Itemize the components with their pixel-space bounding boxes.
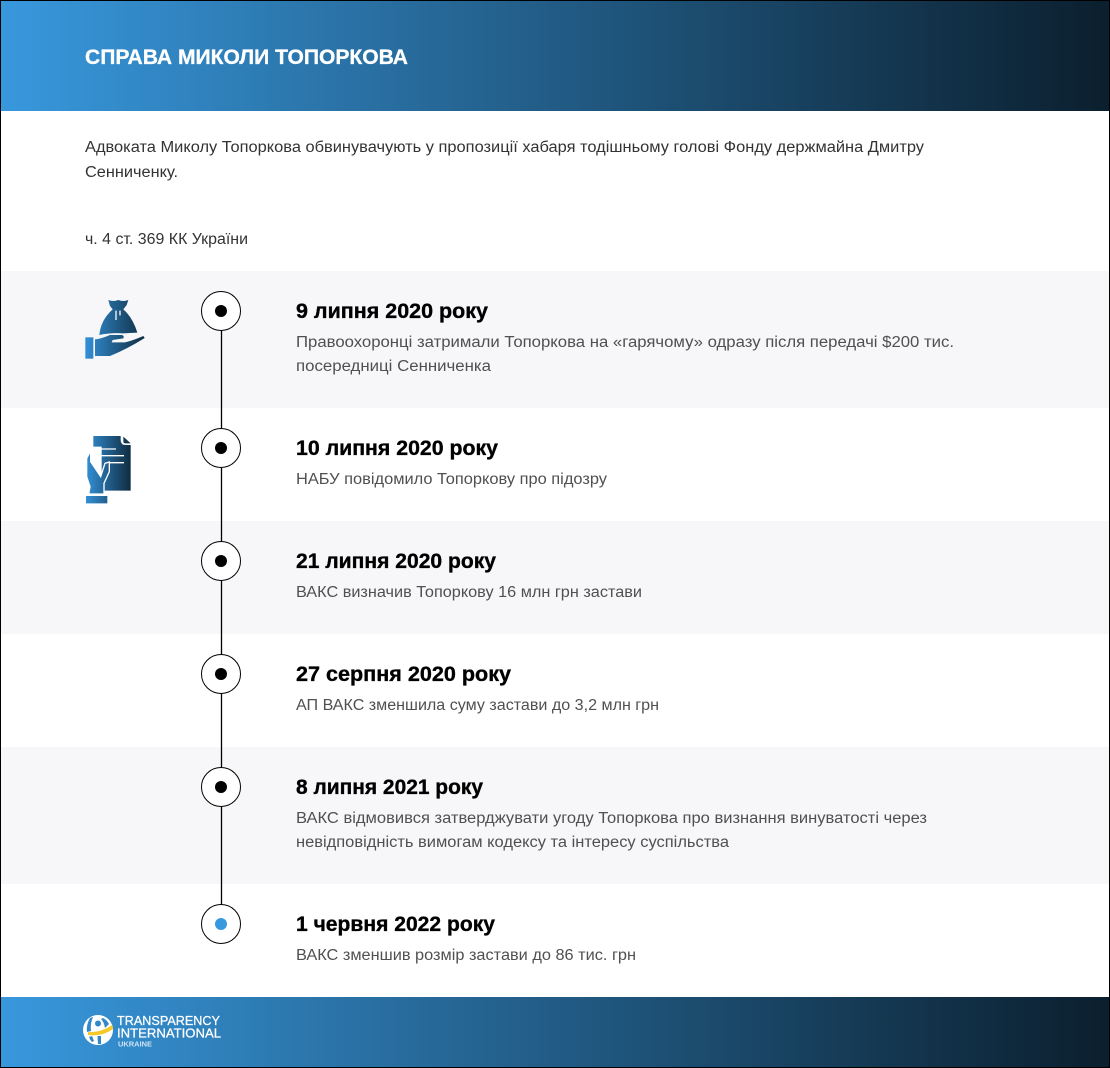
description: невідповідність вимогам кодексу та інтересу суспільства	[296, 834, 729, 851]
marker	[202, 768, 240, 806]
description: посередниці Сенниченка	[296, 358, 491, 375]
marker	[202, 292, 240, 330]
date: 8 липня 2021 року	[296, 776, 483, 799]
logo emblem	[83, 1015, 113, 1045]
description: ВАКС зменшив розмір застави до 86 тис. грн	[296, 947, 636, 964]
date: 27 серпня 2020 року	[296, 663, 511, 686]
row background: 21 July 2020	[0, 521, 1110, 634]
title: СПРАВА МИКОЛИ ТОПОРКОВА	[85, 46, 408, 69]
event: 27 August 2020	[202, 654, 659, 714]
timeline line	[220, 311, 222, 924]
marker	[202, 428, 240, 468]
marker	[202, 654, 240, 694]
icon: hand holding document	[86, 436, 131, 503]
logo: Transparency International Ukraine: INTERNATIONAL	[117, 1026, 221, 1040]
description	[296, 334, 954, 375]
description: НАБУ повідомило Топоркову про підозру	[296, 471, 607, 488]
row background: 8 July 2021	[0, 747, 1110, 884]
event: 8 July 2021	[202, 768, 927, 851]
date: 1 червня 2022 року	[296, 913, 495, 936]
date: 10 липня 2020 року	[296, 437, 498, 460]
intro text: Сенниченку.	[85, 164, 178, 181]
intro text: Адвоката Миколу Топоркова обвинувачують у пропозиції хабаря тодішньому голові Фонду держмайна Дмитру	[85, 139, 924, 156]
row background: 9 July 2020	[0, 271, 1110, 408]
description: ВАКС визначив Топоркову 16 млн грн застави	[296, 584, 642, 601]
intro text	[85, 139, 924, 181]
description: ВАКС відмовився затверджувати угоду Топоркова про визнання винуватості через	[296, 810, 927, 827]
logo: Transparency International Ukraine: UKRAINE	[118, 1040, 152, 1048]
event: 9 July 2020	[202, 292, 954, 375]
marker	[202, 904, 240, 944]
event: 10 July 2020	[202, 428, 607, 488]
description: Правоохоронці затримали Топоркова на «гарячому» одразу після передачі $200 тис.	[296, 334, 954, 351]
logo: Transparency International Ukraine: TRANSPARENCY	[117, 1013, 220, 1028]
description	[296, 810, 927, 851]
legal article reference: ч. 4 ст. 369 КК України	[85, 231, 248, 248]
event: 21 July 2020	[202, 542, 642, 601]
icon: money bag on hand	[85, 300, 145, 359]
date: 21 липня 2020 року	[296, 550, 496, 573]
marker	[202, 542, 240, 580]
description: АП ВАКС зменшила суму застави до 3,2 млн грн	[296, 697, 659, 714]
event: 1 June 2022	[202, 904, 636, 964]
header banner	[0, 0, 1110, 111]
date: 9 липня 2020 року	[296, 300, 488, 323]
footer banner	[0, 997, 1110, 1068]
logo: Transparency International Ukraine	[83, 1013, 221, 1048]
